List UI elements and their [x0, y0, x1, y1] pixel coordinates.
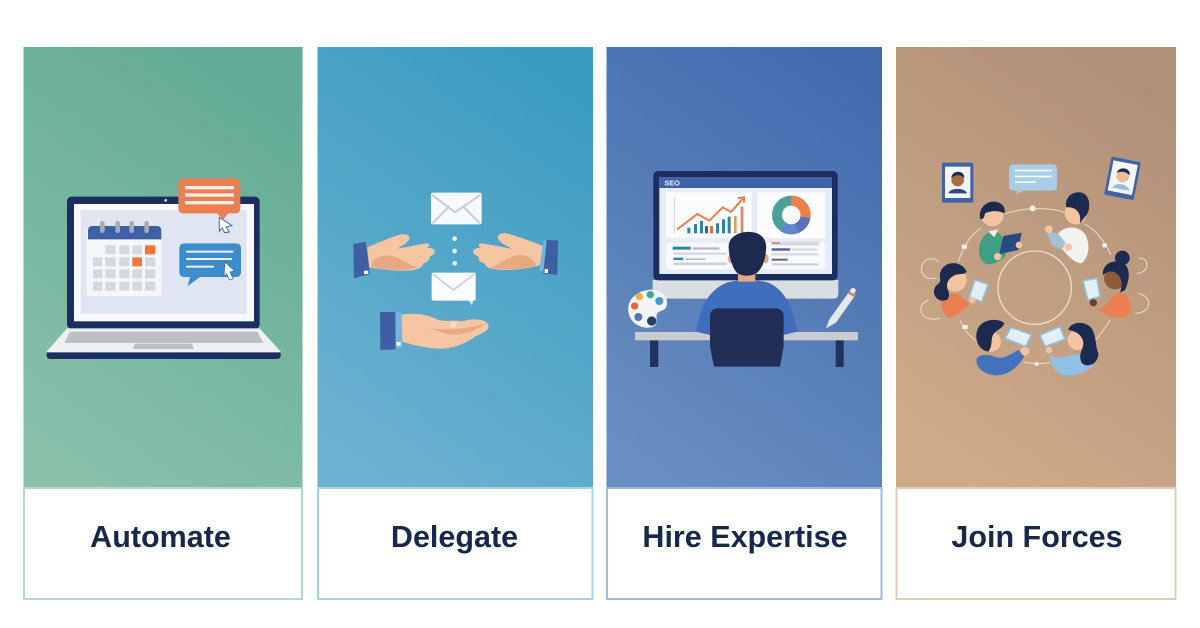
icon: laptop with calendar and chat: [47, 178, 281, 359]
desk: [635, 332, 858, 367]
person: right with tablet: [1083, 251, 1131, 318]
icon: pencil: [826, 288, 856, 328]
join forces heading: Join Forces: [951, 520, 1123, 554]
lower envelope: [432, 273, 476, 305]
monitor: [653, 280, 838, 299]
person: left with tablet: [934, 263, 988, 318]
person: bottom left with tablet: [976, 320, 1032, 375]
donut chart panel: [757, 192, 825, 238]
automate heading: Automate: [90, 520, 231, 554]
delegate image background: [318, 47, 593, 488]
hire expertise image background: [606, 47, 882, 488]
person: top left with tablet: [979, 202, 1022, 264]
icon: hands passing envelopes: [353, 193, 558, 350]
connection rings: [921, 209, 1149, 364]
panel: automate: [24, 47, 302, 599]
person: bottom right with tablet: [1040, 323, 1098, 376]
left hand: [353, 234, 435, 278]
delegate heading: Delegate: [391, 520, 518, 554]
icon: specialist at SEO monitor: [628, 171, 858, 367]
calendar: [87, 221, 161, 296]
bottom hand: [380, 312, 489, 350]
SEO label: SEO: [664, 178, 680, 187]
automate image background: [24, 47, 302, 488]
automate label box: [24, 488, 302, 599]
office chair: [710, 308, 784, 367]
top envelope: [431, 193, 482, 224]
line and bar chart panel: [666, 192, 752, 238]
join forces image background: [896, 47, 1176, 488]
icon: paint palette: [628, 290, 667, 328]
panel: delegate: [318, 47, 593, 599]
tablet left: [942, 163, 973, 203]
panel: join forces: [896, 47, 1176, 599]
hire expertise label box: [607, 488, 882, 599]
join forces label box: [896, 488, 1176, 599]
hire expertise heading: Hire Expertise: [642, 520, 848, 554]
right hand: [473, 233, 558, 275]
transfer dots: [452, 236, 457, 266]
data table panels: [666, 242, 825, 269]
orange chat bubble: [178, 178, 240, 233]
panel: hire expertise: [606, 47, 882, 599]
specialist: [696, 232, 797, 335]
chat bubble: [1009, 164, 1057, 194]
icon: team collaboration circle: [921, 157, 1149, 376]
blue chat bubble: [179, 243, 241, 286]
delegate label box: [318, 488, 592, 599]
person: top right with tablet: [1045, 192, 1089, 263]
tablet right: [1104, 157, 1141, 200]
